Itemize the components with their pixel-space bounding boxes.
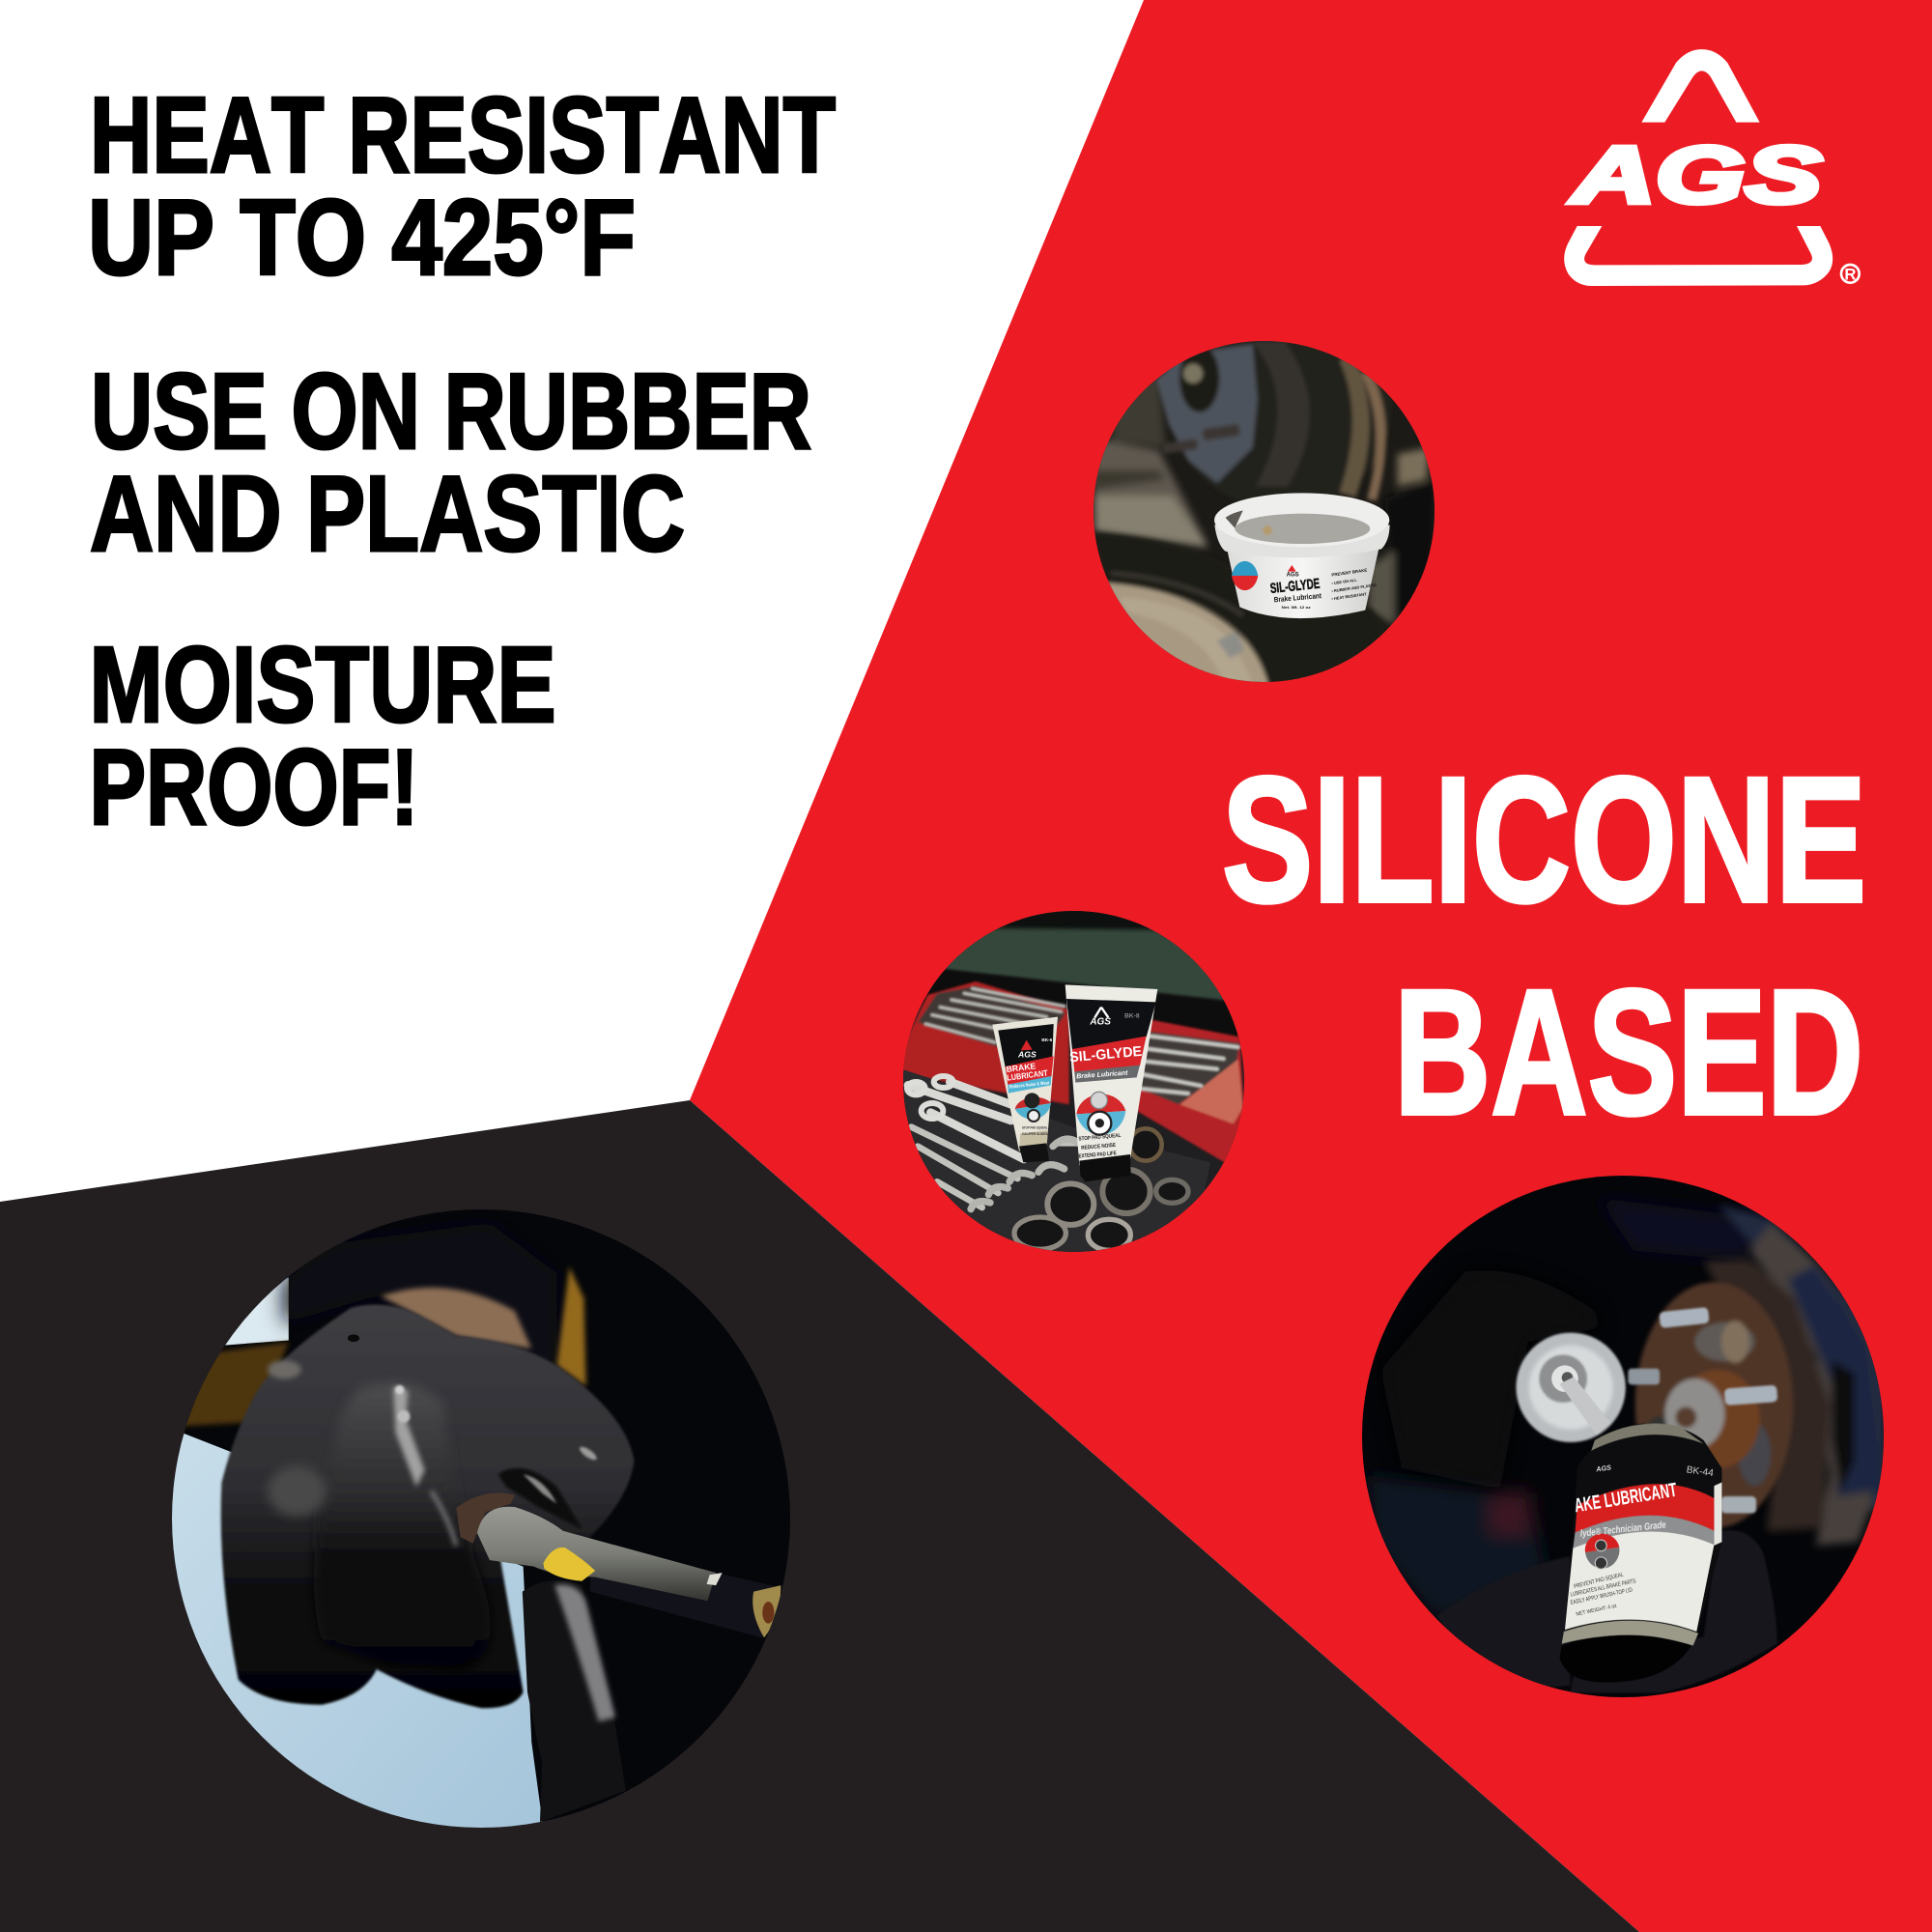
photo 3 can label text: NET WEIGHT: 4 oz <box>1576 1604 1618 1618</box>
photo 2 large tube text <box>1069 1008 1143 1160</box>
photo: brake lubricant tub on a tire <box>1094 341 1435 682</box>
photo 4 pale blue table <box>155 1422 544 1852</box>
photo 3 can label text <box>1570 1463 1715 1618</box>
photo 2 small tube text: LUBRICANT <box>1007 1067 1049 1083</box>
photo 1 tub label text: Net. Wt. 12 oz <box>1282 606 1311 610</box>
photo 3 wheel studs <box>1628 1307 1777 1513</box>
logo wordmark: AGS <box>1570 129 1822 219</box>
logo top chevron <box>1641 49 1760 123</box>
heading: use on rubber and plastic: AND PLASTIC <box>90 454 685 574</box>
photo 2 large tube text: REDUCE NOISE <box>1081 1143 1117 1151</box>
heading: moisture proof <box>89 625 556 847</box>
photo 1 tub label text: • USE ON ALL <box>1331 578 1358 585</box>
photo 4 background wall and wood <box>180 1223 586 1426</box>
photo 1 tub label text: Brake Lubricant <box>1273 591 1322 604</box>
photo 2 small tube text: CALIPER SLIDES <box>1022 1132 1048 1136</box>
heading: silicone based <box>1222 741 1866 1152</box>
photo 2 large tube text: STOP PAD SQUEAL <box>1078 1133 1122 1143</box>
photo 2 small tube text: STOP PAD SQUEAL <box>1022 1126 1048 1130</box>
photo 2 small tube text: Reduces Noise & Wear <box>1009 1080 1050 1091</box>
heading: heat resistant <box>88 75 836 298</box>
photo 2 red right tray <box>1137 1017 1244 1166</box>
photo 2 ratchet wrenches <box>907 1076 1079 1209</box>
photo 1 tub label text: SIL-GLYDE <box>1269 577 1321 597</box>
photo 1 brake rotor <box>1155 341 1393 502</box>
photo: gloved hand applying yellow grease <box>155 1203 802 1852</box>
photo 1 tire and wheel rim <box>1094 533 1388 686</box>
photo 4 glove <box>221 1304 635 1708</box>
photo 2 red left tray <box>901 981 1069 1104</box>
photo 1 tub label text: • HEAT RESISTANT <box>1331 591 1367 601</box>
photo 1 tub label text: AGS <box>1287 573 1299 579</box>
photo 3 can label text: PREVENT PAD SQUEAL <box>1574 1572 1625 1590</box>
photo 1 tub label text: • RUBBER AND PLASTIC <box>1331 582 1378 593</box>
heading: moisture proof: MOISTURE <box>89 625 556 745</box>
heading: use on rubber and plastic <box>90 352 811 574</box>
black panel <box>0 1100 1639 1932</box>
photo 2 left tray wrenches <box>925 988 1065 1042</box>
photo 4 yellow grease blob <box>543 1548 595 1581</box>
logo bottom bracket <box>1564 226 1833 286</box>
photo: can of brake lubricant with brush <box>1352 1169 1893 1710</box>
photo 2 small tube text: AGS <box>1017 1050 1037 1060</box>
photo 3 can label text: AKE LUBRICANT <box>1573 1480 1679 1517</box>
photo 3 lower gloves <box>1436 1530 1777 1693</box>
logo registered mark: R <box>1844 265 1856 283</box>
photo 2 green tool chest <box>908 908 1243 1040</box>
photo 3 upper glove <box>1380 1270 1600 1490</box>
heading: moisture proof: PROOF! <box>89 727 419 847</box>
photo 1 white tub <box>1214 493 1390 618</box>
photo 3 brush disc <box>1516 1333 1626 1442</box>
photo 3 can label text: LUBRICATES ALL BRAKE PARTS <box>1570 1577 1636 1599</box>
photo 1 tub label text: PREVENT BRAKE <box>1331 568 1368 578</box>
photo 3 dark blue background glow <box>1367 1198 1767 1619</box>
photo 4 lower thumb <box>523 1580 626 1822</box>
photo 4 metal tool <box>456 1492 781 1637</box>
photo 3 caliper and blue backing plate <box>1704 1205 1887 1546</box>
photo 2 large tube text: EXTEND PAD LIFE <box>1078 1151 1117 1160</box>
photo 1 tub label text <box>1269 565 1378 610</box>
photo 1 tub label badge <box>1232 561 1258 590</box>
AGS logo <box>1564 49 1860 286</box>
photo 2 sockets <box>1014 1128 1188 1250</box>
photo 2 right tray wrenches <box>1138 1036 1238 1094</box>
photo 2 large tube text: Brake Lubricant <box>1076 1070 1128 1080</box>
photo 3 can label text: BK-44 <box>1686 1464 1715 1479</box>
photo 3 can label text: AGS <box>1595 1463 1612 1474</box>
photo 2 small tube text <box>1006 1037 1053 1136</box>
photo 2 large tube text: AGS <box>1089 1017 1111 1028</box>
photo 2 small tube <box>992 1017 1058 1162</box>
photo 2 large tube <box>1065 984 1157 1181</box>
logo registered mark <box>1841 265 1860 283</box>
heading: heat resistant: HEAT RESISTANT <box>90 75 836 195</box>
photo 2 small tube text: BK-6 <box>1041 1037 1053 1042</box>
heading: use on rubber and plastic: USE ON RUBBER <box>91 352 811 471</box>
photo 3 can label text: lyde® Technician Grade <box>1579 1520 1666 1540</box>
photo: lubricant tubes on a tool tray <box>898 908 1246 1256</box>
photo 2 large tube text: SIL-GLYDE <box>1069 1044 1143 1065</box>
photo 1 background garage floor <box>1092 374 1436 625</box>
heading: heat resistant: UP TO 425°F <box>88 178 636 298</box>
photo 2 large tube text: BK-8 <box>1124 1012 1140 1019</box>
photo 3 can label text: EASILY APPLY BRUSH-TOP LID <box>1570 1586 1634 1606</box>
photo 3 rusty hub <box>1635 1282 1793 1528</box>
red panel <box>690 0 1932 1932</box>
photo 2 black mat <box>901 1069 1210 1253</box>
photo 3 can <box>1559 1424 1721 1683</box>
photo 2 small tube text: BRAKE <box>1006 1061 1037 1074</box>
